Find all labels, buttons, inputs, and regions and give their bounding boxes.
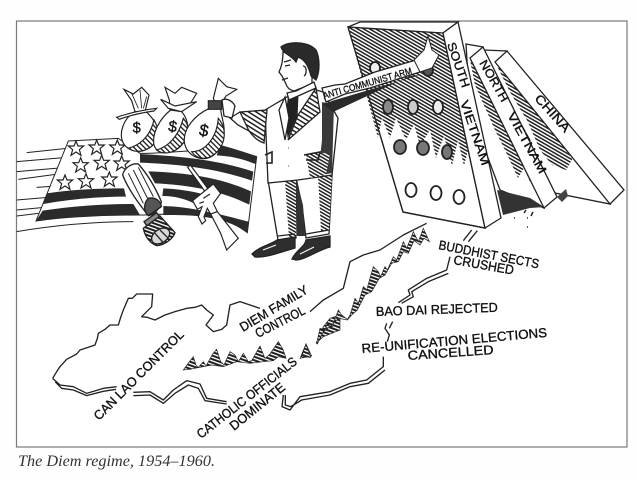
map label: Buddhist sects crushed: CRUSHED bbox=[452, 252, 515, 278]
domino label: North Vietnam: VIETNAM bbox=[504, 110, 550, 176]
domino dots bbox=[370, 62, 464, 204]
icon: bomb bbox=[123, 164, 175, 247]
icon: rifle bbox=[188, 165, 238, 250]
map label: Catholic officials dominate: DOMINATE bbox=[226, 379, 288, 433]
flag speed lines bbox=[17, 148, 133, 232]
domino label: China: CHINA bbox=[532, 92, 573, 136]
flag stars bbox=[57, 140, 129, 189]
map label: Bao Dai rejected: BAO DAI REJECTED bbox=[376, 300, 498, 319]
domino: China bbox=[484, 50, 624, 204]
money bag 3: $ bbox=[198, 120, 210, 141]
domino crumbs bbox=[514, 210, 533, 227]
map label: Can Lao control: CAN LAO CONTROL bbox=[91, 327, 187, 423]
map label: Diem family control: CONTROL bbox=[253, 303, 307, 341]
man cuff bbox=[230, 112, 249, 131]
flag with speed lines bbox=[17, 78, 257, 250]
man hand holding bag bbox=[222, 99, 235, 118]
map label: Re-unification elections cancelled: RE-UNIFICATION ELECTIONS bbox=[361, 325, 548, 356]
man tie bbox=[286, 91, 298, 136]
man collar bbox=[287, 82, 316, 100]
man head bbox=[279, 52, 312, 91]
map label: Buddhist sects crushed: BUDDHIST SECTS bbox=[437, 237, 541, 271]
domino label: North Vietnam bbox=[476, 58, 550, 176]
man legs bbox=[268, 175, 332, 240]
flag cloth bbox=[36, 138, 257, 233]
map mountains bbox=[183, 315, 340, 370]
man lapels bbox=[279, 97, 289, 140]
map label: Re-unification elections cancelled: CANCELLED bbox=[407, 342, 494, 363]
domino: South Vietnam bbox=[348, 22, 501, 228]
domino label: South Vietnam: VIETNAM bbox=[457, 98, 493, 167]
domino label: North Vietnam: NORTH bbox=[476, 58, 512, 104]
domino: North Vietnam bbox=[466, 44, 557, 208]
map label: Diem family control: DIEM FAMILY bbox=[237, 282, 311, 335]
man shoes bbox=[252, 236, 330, 260]
icon: money bags bbox=[117, 78, 237, 159]
domino label: South Vietnam: SOUTH bbox=[444, 40, 473, 89]
man sleeve holding bag bbox=[240, 110, 267, 143]
domino shadow on ground bbox=[497, 190, 544, 215]
arm hand bbox=[414, 36, 439, 72]
map label: Catholic officials dominate: CATHOLIC OFFICIALS bbox=[194, 354, 300, 441]
man in suit bbox=[222, 43, 338, 260]
man jacket bbox=[265, 88, 338, 183]
arm label: ANTI COMMUNIST ARM bbox=[322, 66, 413, 102]
map lower coast, north bbox=[53, 378, 227, 404]
domino label: South Vietnam bbox=[444, 40, 493, 167]
flag stripes bbox=[36, 145, 257, 233]
caption: The Diem regime, 1954–1960. bbox=[18, 453, 215, 470]
anti-communist arm bbox=[322, 36, 439, 112]
jacket pockets and buttons bbox=[265, 148, 320, 166]
money bag 2: $ bbox=[167, 118, 178, 136]
money bag 1: $ bbox=[133, 121, 141, 137]
map mountains south bbox=[302, 228, 429, 357]
map south coast bbox=[282, 223, 477, 410]
domino ground shadow right bbox=[557, 189, 568, 202]
dominoes bbox=[348, 22, 624, 228]
map of Vietnam bbox=[53, 294, 260, 404]
man face details bbox=[282, 60, 306, 80]
map upper coast, north bbox=[53, 294, 260, 378]
man hair bbox=[281, 43, 319, 80]
